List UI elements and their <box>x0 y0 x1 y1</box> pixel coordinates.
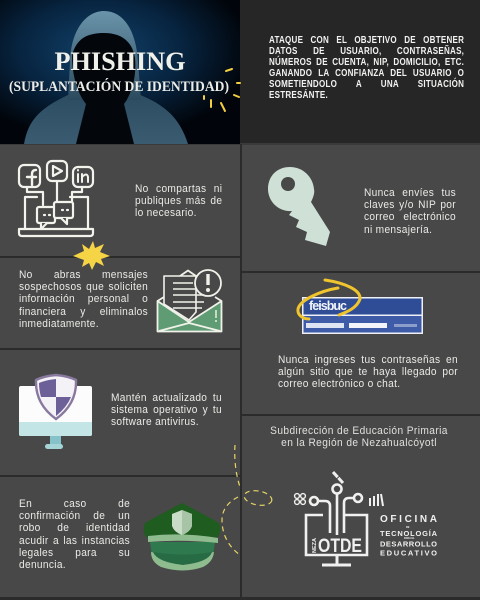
text: en caso de confirmación: robo de identidad <box>19 522 130 534</box>
text: no compartas: lo necesario. <box>135 207 197 219</box>
logo: OTDE monitor: EDUCATIVO <box>380 548 437 558</box>
text: no abras mensajes <box>19 269 148 330</box>
text: nunca ingreses: algún sitio que te haya llegado por <box>278 366 458 378</box>
icon: envelope with warning <box>156 269 222 332</box>
image: fake feisbuc login: feisbuc <box>309 299 347 313</box>
text: phishing definition <box>269 35 464 101</box>
text: no abras mensajes: No abras mensajes <box>19 269 148 281</box>
text: phishing definition: ATAQUE CON EL OBJETIVO DE OBTENER <box>269 35 464 46</box>
text: en caso de confirmación: legales para su <box>19 547 130 559</box>
panel: social networks tip <box>18 160 222 238</box>
image: fake feisbuc login <box>296 278 423 334</box>
icon: laptop with social media <box>18 160 94 238</box>
text: nunca envíes: claves y/o NIP por <box>364 199 456 211</box>
icon: yellow spark rays <box>203 68 241 112</box>
text: no abras mensajes: información personal o <box>19 293 148 305</box>
text: no abras mensajes: financiera y eliminalos <box>19 306 148 318</box>
panel: antivirus tip <box>19 374 222 449</box>
logo: OTDE monitor: OTDE <box>318 536 362 557</box>
text: no compartas: No compartas ni <box>135 183 222 195</box>
text: subdirección: Subdirección de Educación Primaria <box>270 425 448 437</box>
logo: OTDE monitor <box>294 471 438 566</box>
panel: suspicious mail tip <box>19 269 222 332</box>
panel: key tip <box>268 167 456 246</box>
icon: police cap <box>144 503 220 570</box>
text: nunca ingreses <box>278 354 458 390</box>
text: subdirección <box>270 425 448 449</box>
text: phishing definition: SOMETIENDOLO A UNA SITUACIÓN <box>269 79 464 90</box>
logo: OTDE monitor: OFICINA <box>380 514 437 525</box>
panel: hero hooded figure with title: PHISHING <box>54 47 186 76</box>
decoration: dashed yellow connector <box>221 445 272 554</box>
text: no compartas <box>135 183 222 219</box>
icon: yellow burst <box>73 241 110 270</box>
panel: identity theft tip <box>19 498 220 571</box>
logo: OTDE monitor: DE <box>406 526 410 529</box>
text: en caso de confirmación: confirmación de un <box>19 510 130 522</box>
text: en caso de confirmación: acudir a las instancias <box>19 535 130 547</box>
text: phishing definition: GANANDO LA CONFIANZA DEL USUARIO O <box>269 68 464 79</box>
text: nunca envíes: correo electrónico <box>364 211 456 223</box>
text: en caso de confirmación: denuncia. <box>19 559 66 571</box>
text: en caso de confirmación <box>19 498 130 571</box>
text: phishing definition: ESTRESÁNTE. <box>269 90 328 101</box>
icon: monitor with shield <box>19 374 92 449</box>
panel: hero hooded figure with title: (SUPLANTACIÓN DE IDENTIDAD) <box>9 78 229 95</box>
text: nunca ingreses: Nunca ingreses tus contraseñas en <box>278 354 458 366</box>
text: no abras mensajes: sospechosos que soliciten <box>19 281 148 293</box>
logo: OTDE monitor: PARA EL <box>404 537 415 540</box>
panel: hero hooded figure with title <box>0 0 240 144</box>
logo: OTDE monitor: DESARROLLO <box>380 540 437 548</box>
icon: key <box>268 167 330 246</box>
text: nunca envíes: ni mensajería. <box>364 224 432 236</box>
text: mantén actualizado: software antivirus. <box>111 416 199 428</box>
text: nunca ingreses: correo electrónico o chat. <box>278 378 400 390</box>
text: nunca envíes: Nunca envíes tus <box>364 187 456 199</box>
logo: OTDE monitor: TECNOLOGÍA <box>380 529 438 538</box>
text: mantén actualizado: Mantén actualizado tu <box>111 392 222 404</box>
text: en caso de confirmación: En caso de <box>19 498 130 510</box>
text: no compartas: publiques más de <box>135 195 222 207</box>
panel: fake site tip <box>278 278 458 390</box>
text: phishing definition: NÚMEROS DE CUENTA, NIP, DOMICILIO, ETC. <box>269 57 464 68</box>
panel: intro background <box>240 0 480 144</box>
text: mantén actualizado: sistema operativo y tu <box>111 404 222 416</box>
text: mantén actualizado <box>111 392 222 428</box>
logo: OTDE monitor: NEZA <box>312 538 318 553</box>
panel: OTDE footer <box>270 425 448 566</box>
text: no abras mensajes: inmediatamente. <box>19 318 99 330</box>
text: phishing definition: DATOS DE USUARIO, CONTRASEÑAS, <box>269 46 464 57</box>
text: subdirección: en la Región de Nezahualcóyotl <box>281 437 437 449</box>
text: nunca envíes <box>364 187 456 236</box>
